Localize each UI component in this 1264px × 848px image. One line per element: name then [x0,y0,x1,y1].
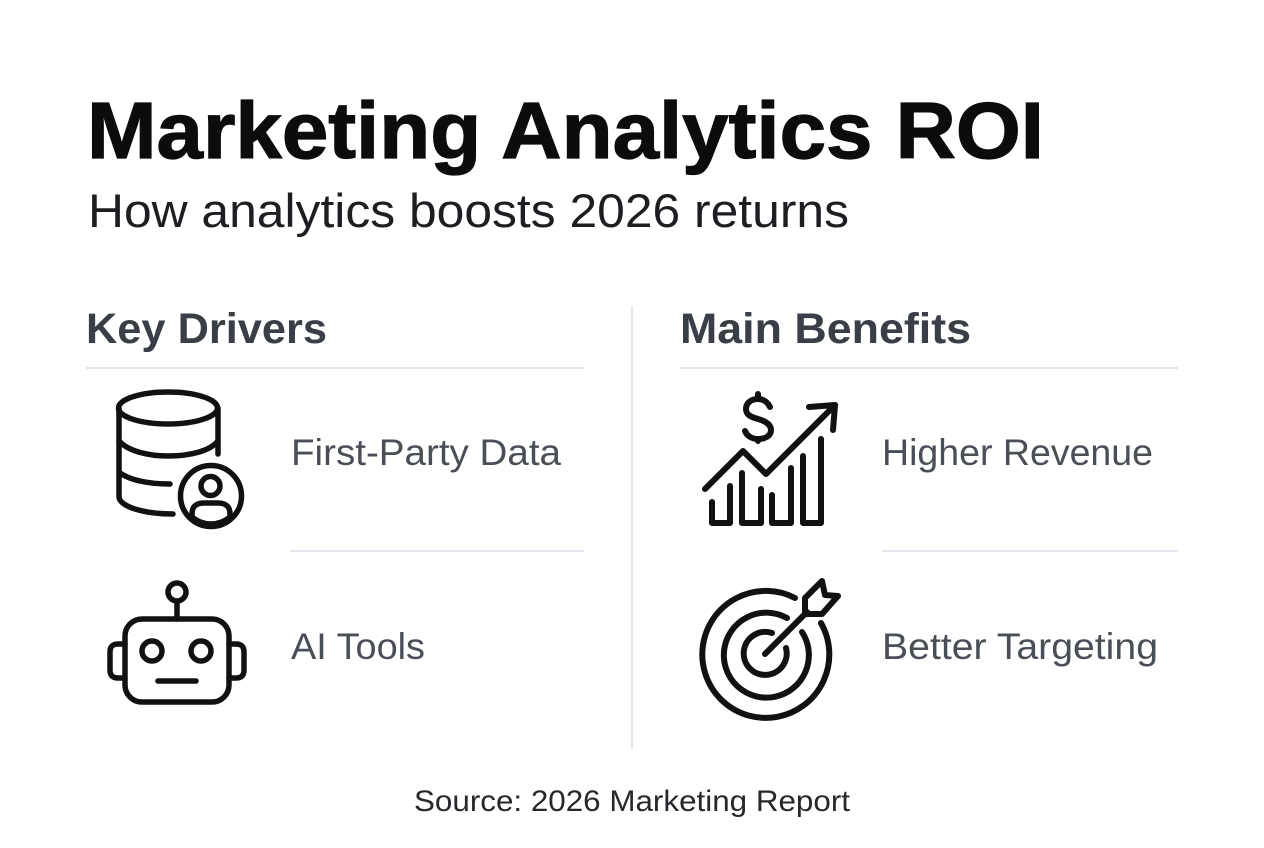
title: Marketing Analytics ROI [87,86,1044,175]
panel: main benefits [680,305,1178,718]
label: higher revenue: Higher Revenue [882,432,1153,473]
subtitle: How analytics boosts 2026 returns [88,184,849,237]
source note: Source: 2026 Marketing Report [414,785,851,818]
heading: key drivers: Key Drivers [86,305,327,353]
heading: main benefits: Main Benefits [680,305,971,353]
label: better targeting: Better Targeting [882,626,1158,667]
label: first-party data: First-Party Data [291,432,561,473]
panel: key drivers [86,305,584,702]
icon: revenue chart with dollar [705,394,835,523]
label: ai tools: AI Tools [291,626,425,667]
icon: database with user [118,392,242,526]
icon: target with arrow [702,581,838,718]
icon: robot [110,583,244,702]
